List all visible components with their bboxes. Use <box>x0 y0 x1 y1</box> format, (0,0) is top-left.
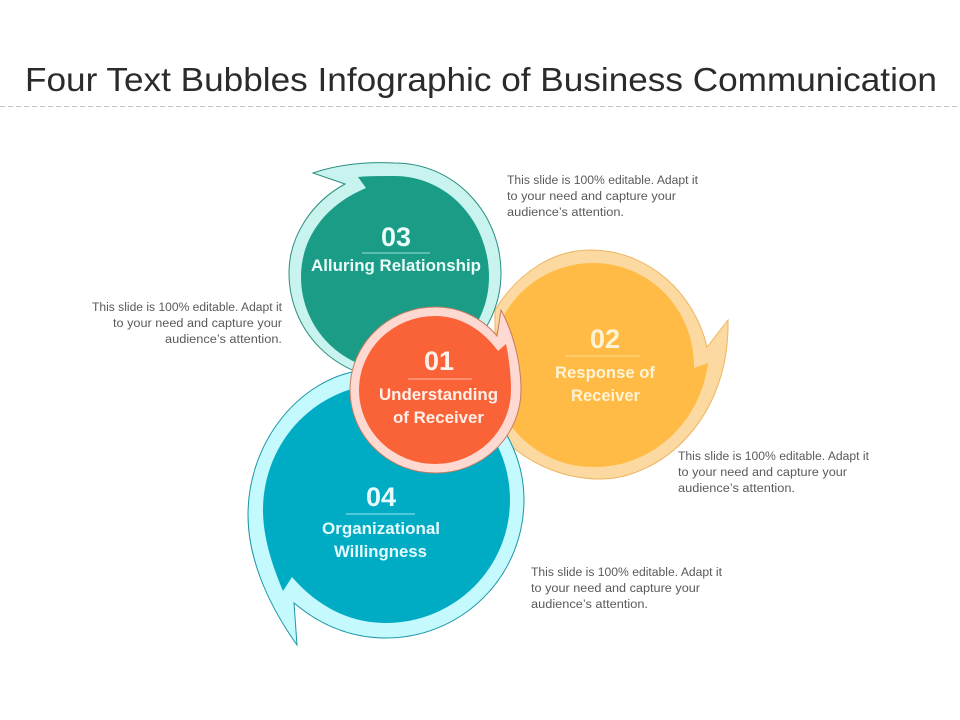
bubble 03: alluring relationship <box>289 163 501 379</box>
text block: bubble 03 description: This slide is 100% editable. Adapt it <box>507 175 699 187</box>
text block: bubble 03 description <box>507 175 699 219</box>
title: Four Text Bubbles Infographic of Business Communication <box>25 61 937 98</box>
bubble 04 label: Willingness <box>334 543 427 561</box>
bubble 04 label: Organizational <box>322 520 440 538</box>
text block: bubble 04 description: audience’s attention. <box>531 599 648 611</box>
text block: bubble 01 description: This slide is 100% editable. Adapt it <box>92 302 283 314</box>
bubble 02 label: Receiver <box>571 387 641 405</box>
text block: bubble 03 description: to your need and capture your <box>507 191 676 203</box>
text block: bubble 01 description: audience’s attention. <box>165 334 282 346</box>
text block: bubble 04 description <box>531 567 723 611</box>
bubble 02: response of receiver <box>491 250 728 479</box>
bubble 01 number: 01 <box>424 346 454 376</box>
bubble 02 label <box>555 364 655 405</box>
bubble 03 number: 03 <box>381 222 411 252</box>
text block: bubble 01 description: to your need and capture your <box>113 318 282 330</box>
bubble 04 number: 04 <box>366 482 396 512</box>
text block: bubble 01 description <box>92 302 283 346</box>
text block: bubble 04 description: to your need and capture your <box>531 583 700 595</box>
text block: bubble 02 description: to your need and capture your <box>678 467 847 479</box>
bubble 01 label: Understanding <box>379 386 498 404</box>
bubble 01: understanding of receiver <box>350 307 521 473</box>
bubble 04 label <box>322 520 440 561</box>
text block: bubble 03 description: audience’s attention. <box>507 207 624 219</box>
text block: bubble 04 description: This slide is 100% editable. Adapt it <box>531 567 723 579</box>
bubble 02 label: Response of <box>555 364 655 382</box>
text block: bubble 02 description <box>678 451 870 495</box>
text block: bubble 02 description: audience’s attention. <box>678 483 795 495</box>
bubble 04: organizational willingness <box>248 365 524 645</box>
bubble 02 number: 02 <box>590 324 620 354</box>
bubble 03 label: Alluring Relationship <box>311 257 481 275</box>
bubble 01 label <box>379 386 498 427</box>
text block: bubble 02 description: This slide is 100% editable. Adapt it <box>678 451 870 463</box>
bubble 01 label: of Receiver <box>393 409 485 427</box>
